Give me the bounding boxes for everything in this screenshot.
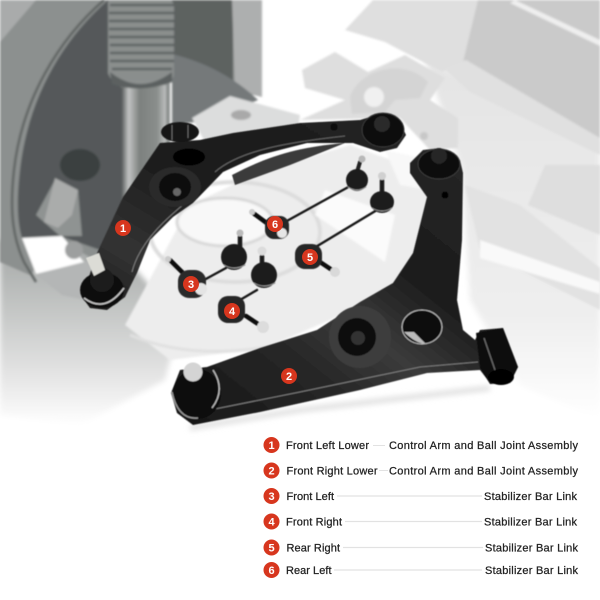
legend row 1: 1 [268,440,275,452]
legend row 1: Control Arm and Ball Joint Assembly [389,440,578,452]
callout badge 6: 6 [272,219,278,231]
part: control arm 2 [171,148,518,425]
ball joint [172,362,221,419]
part: stabilizer link 6 [249,156,368,239]
arm 2 soft shadow [190,388,490,428]
lower right highlight [480,240,600,294]
legend [264,437,578,578]
recessed bushing [149,167,201,207]
legend row 5: Stabilizer Bar Link [485,542,578,554]
legend row 5: Rear Right [286,542,340,554]
legend row 6: Stabilizer Bar Link [485,565,578,577]
legend row 3: Stabilizer Bar Link [484,491,578,503]
recessed bushing [329,306,391,368]
callout badge 2 [281,368,297,384]
legend row 6 [264,562,578,578]
callout badge 5 [302,249,318,265]
upper clamp [161,122,199,142]
legend row 2 [264,462,578,478]
legend row 2: 2 [268,466,275,478]
part: stabilizer link 3 [165,230,247,298]
shock absorber strut [109,0,175,200]
upper right panel [345,0,480,72]
rear bushing [362,113,404,147]
callout badge 4: 4 [229,306,236,318]
right side base tone [425,60,600,420]
legend row 2: Front Right Lower [286,466,378,478]
side tube bushing [476,328,518,385]
part: stabilizer link 4 [218,246,277,333]
legend row 3: 3 [268,491,275,503]
legend row 2: Control Arm and Ball Joint Assembly [389,466,578,478]
legend row 1: Front Left Lower [286,440,369,452]
legend row 4 [264,514,578,530]
callout badge 4 [224,303,240,319]
large hole [173,148,205,166]
top bushing [418,148,460,179]
upper bracket [192,96,300,142]
ball joint [80,253,124,308]
callout badge 3: 3 [188,279,194,291]
legend row 4: Stabilizer Bar Link [484,516,578,528]
legend row 4: 4 [268,516,275,528]
legend row 6: Rear Left [286,565,332,577]
legend row 5 [264,540,578,556]
callout badge 1 [115,220,131,236]
legend row 1 [264,437,578,453]
legend row 4: Front Right [286,516,342,528]
part: stabilizer link 5 [295,172,394,277]
callout badge 5: 5 [307,252,313,264]
legend row 6: 6 [268,565,275,577]
legend row 5: 5 [268,542,275,554]
large hole [402,310,442,344]
legend row 3 [264,488,578,504]
callout badge 3 [183,276,199,292]
left wheel lower fade [0,240,180,425]
legend row 3: Front Left [286,491,334,503]
oil pan [443,0,600,310]
engine bracket and bolt [300,52,458,150]
left tire and rim [0,0,262,300]
callout badge 2: 2 [286,371,292,383]
callout badge 1: 1 [120,223,126,235]
part: control arm 1 [80,113,406,310]
callout badge 6 [267,216,283,232]
wheel well plate [125,145,432,360]
background: faded car suspension [0,0,600,428]
